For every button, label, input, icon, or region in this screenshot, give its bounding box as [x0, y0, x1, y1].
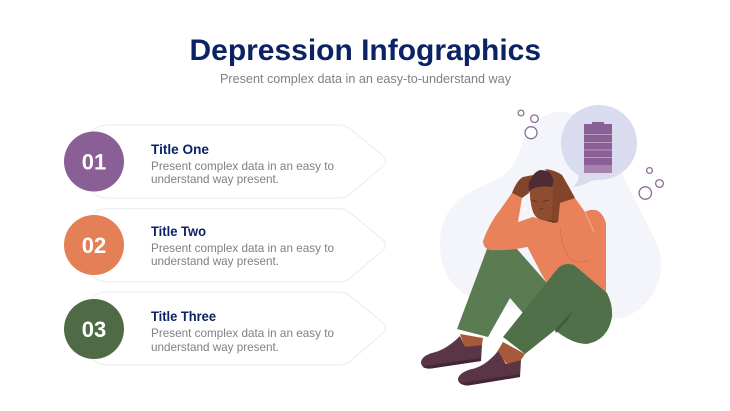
back leg — [457, 249, 547, 337]
description three: Present complex data in an easy to — [151, 326, 334, 340]
panel: item one — [64, 125, 386, 198]
shoe front — [458, 351, 521, 386]
number badge 02: 02 — [82, 233, 106, 258]
arrow card two — [90, 208, 386, 282]
description three — [151, 326, 334, 354]
shoulder arm crease — [560, 228, 590, 262]
head — [530, 180, 560, 222]
description three: understand way present. — [151, 340, 279, 354]
background blob — [440, 112, 661, 319]
left hand — [512, 175, 533, 198]
illustration: depressed person — [421, 105, 663, 386]
number badge 01: 01 — [82, 150, 106, 174]
arrow card one — [90, 125, 386, 198]
description two — [151, 241, 334, 268]
right hand — [545, 169, 575, 223]
description one: understand way present. — [151, 172, 279, 186]
number badge 03: 03 — [82, 317, 106, 342]
speech bubble — [561, 105, 637, 187]
arrow card three — [90, 292, 386, 365]
ankles — [460, 334, 525, 364]
heading: title three: Title Three — [151, 308, 216, 324]
number badge 02 — [64, 215, 124, 275]
thought bubble with low battery — [561, 105, 637, 187]
heading: title two: Title Two — [151, 223, 206, 239]
face details — [532, 200, 554, 222]
description two: understand way present. — [151, 254, 279, 268]
description one: Present complex data in an easy to — [151, 159, 334, 173]
subtitle: Present complex data in an easy-to-understand way — [220, 72, 512, 86]
knee shadow — [555, 310, 573, 333]
thought circles left — [518, 110, 538, 139]
shoe back — [421, 336, 482, 369]
hair — [529, 170, 553, 192]
thought circles right — [639, 168, 663, 199]
title: Depression Infographics — [190, 34, 541, 67]
panel: item three — [64, 292, 386, 365]
battery icon — [584, 122, 612, 173]
panel: item two — [64, 208, 386, 282]
heading: title one: Title One — [151, 141, 209, 157]
front leg — [503, 264, 612, 354]
number badge 03 — [64, 299, 124, 359]
shoe back sole — [423, 358, 481, 369]
shoe front sole — [460, 374, 520, 386]
number badge 01 — [64, 132, 124, 192]
torso — [527, 198, 606, 295]
shoulder highlight — [585, 212, 594, 232]
arm resting on knee — [483, 193, 552, 250]
description two: Present complex data in an easy to — [151, 241, 334, 255]
description one — [151, 159, 334, 186]
